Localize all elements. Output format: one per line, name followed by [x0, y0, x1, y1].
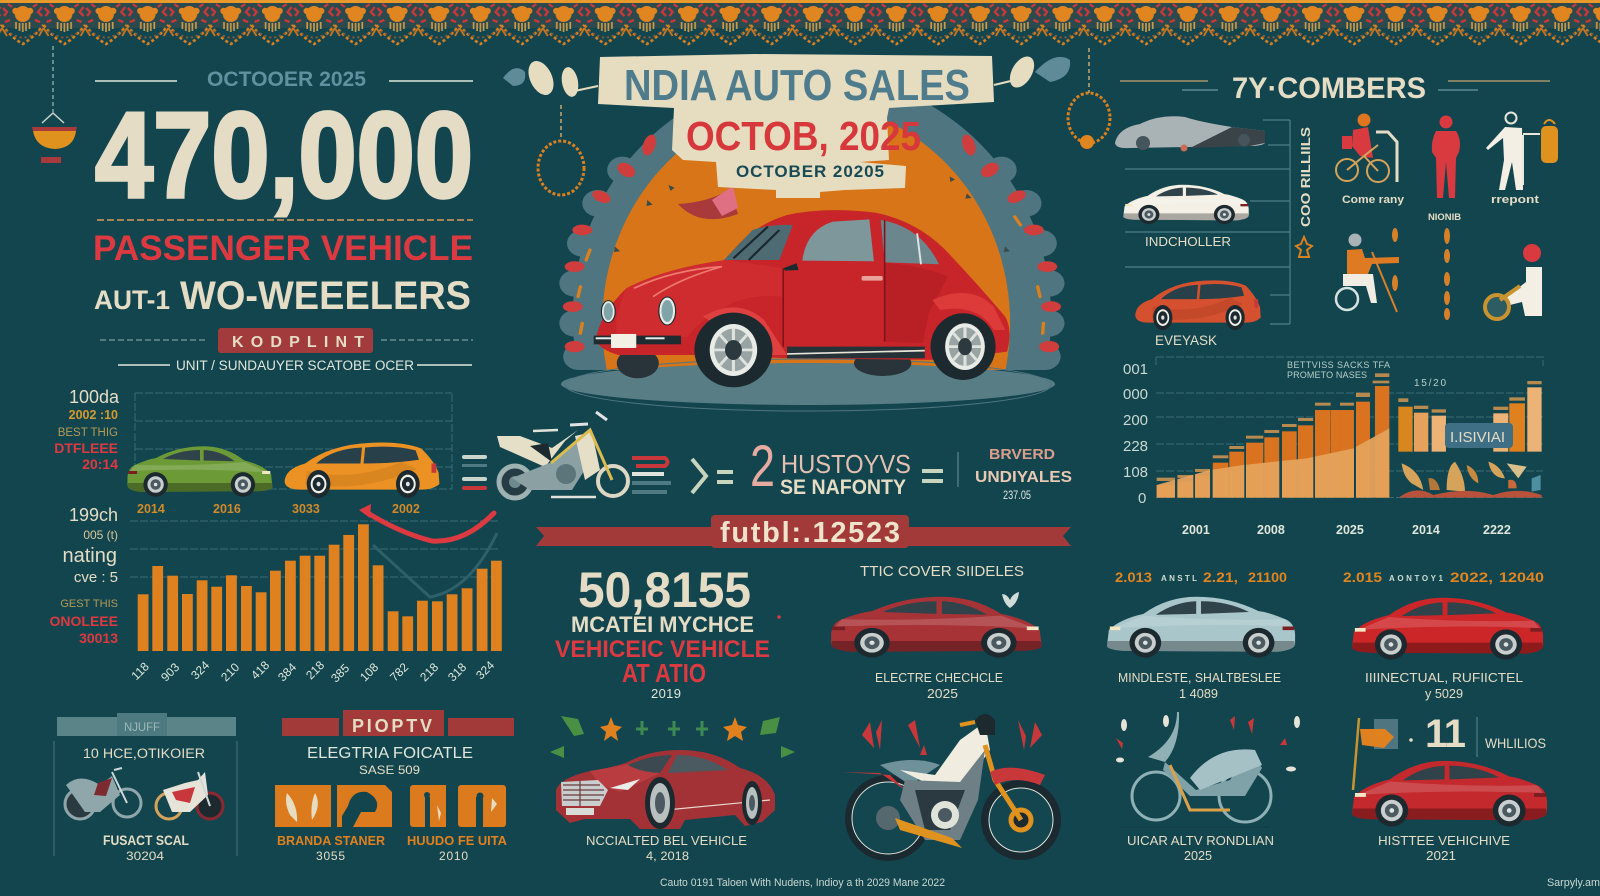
panel: bar chart	[50, 504, 502, 685]
date text: OCTOB, 2025	[686, 113, 921, 159]
icon tiles: brand	[275, 785, 392, 827]
panel: car comparison chart	[54, 387, 452, 516]
chart caption: BETTVISS SACKS TFA	[1287, 360, 1390, 370]
axis labels: 20:14	[82, 456, 118, 472]
side label: UNDIYALES	[975, 469, 1072, 486]
rotated tick labels: 218	[417, 660, 441, 684]
label: blue tag	[1445, 423, 1513, 448]
icon: maroon sedan	[831, 597, 1042, 658]
card: fiscal bikes: 10 HCE,OTIKOIER	[83, 746, 205, 761]
side label	[975, 446, 1072, 502]
leader lines	[1125, 120, 1290, 324]
axis labels: cve : 5	[74, 569, 118, 586]
axis labels: 005 (t)	[83, 528, 118, 542]
stat number	[1409, 712, 1546, 757]
icon: hanging lantern	[32, 46, 77, 163]
label: indcholler: INDCHOLLER	[1145, 234, 1231, 249]
icon: motorcycle	[497, 412, 628, 498]
icon: white person with bag	[1486, 112, 1558, 190]
label: scooter: UICAR ALTV RONDLIAN	[1127, 833, 1274, 848]
panel: right bar chart	[1123, 357, 1543, 537]
card: flag stat: 2021	[1426, 849, 1456, 863]
card: flag stat: HISTTEE VEHICHIVE	[1378, 833, 1510, 848]
icon: white car	[1123, 185, 1249, 224]
axis labels: 100da	[69, 387, 120, 407]
card: electric vehicle: 2025	[927, 686, 958, 701]
rotated tick labels: 210	[218, 660, 242, 684]
label: company: Come rany	[1342, 194, 1405, 206]
x axis labels: 2025	[1336, 523, 1364, 537]
rotated tick labels	[128, 658, 497, 685]
stat block: MCATEI MYCHCE	[571, 612, 754, 637]
subtitle: two wheelers: AUT-1	[94, 285, 170, 315]
rotated tick labels: 108	[357, 660, 381, 684]
x axis labels: 2222	[1483, 523, 1511, 537]
chart caption: PROMETO NASES	[1287, 370, 1367, 380]
x axis labels	[1182, 523, 1511, 537]
big number: 470,000	[95, 87, 473, 223]
x axis labels: 2014	[1412, 523, 1440, 537]
stat number: WHLILIOS	[1485, 735, 1546, 751]
rotated tick labels: 385	[328, 661, 352, 685]
hanging ornament left	[538, 105, 584, 195]
axis labels: ONOLEEE	[50, 613, 118, 629]
illustration: large motorcycle	[842, 714, 1061, 861]
card: flag stat	[1352, 712, 1547, 863]
date subtext: OCTOBER 20205	[736, 162, 884, 181]
axis labels: nating	[62, 545, 117, 567]
label badge: KODPLINT	[232, 334, 364, 351]
axis labels: BEST THIG	[58, 427, 118, 439]
card: fiscal bikes: 30204	[126, 849, 164, 863]
y axis labels: 200	[1123, 412, 1148, 429]
icon: red sedan	[1352, 761, 1547, 827]
arch backdrop with garland	[559, 106, 1064, 370]
card: electric forecast: 3055	[316, 849, 345, 863]
label badge	[100, 328, 473, 353]
card: light blue sedan	[1107, 570, 1295, 701]
header figures: 2.21,	[1203, 570, 1238, 585]
card: fiscal bikes: FUSACT SCAL	[103, 832, 189, 848]
illustration: red classic car	[594, 210, 1010, 387]
rotated tick labels: 384	[275, 660, 299, 684]
y axis labels: 001	[1123, 361, 1148, 378]
label: scooter: 2025	[1184, 849, 1212, 863]
icon: green car	[127, 446, 273, 497]
icon: flag	[1353, 718, 1398, 790]
icon: stripes right	[632, 458, 671, 494]
axis labels	[50, 505, 118, 646]
subtitle: passenger vehicle: PASSENGER VEHICLE	[93, 229, 473, 268]
icon: stripes left	[462, 455, 487, 490]
x axis labels: 2001	[1182, 523, 1210, 537]
label: frequent: rrepont	[1491, 194, 1539, 206]
rotated axis label: COO RILLIILS	[1298, 127, 1313, 227]
header figures	[1343, 570, 1544, 585]
heading: month: OCTOOER 2025	[207, 68, 366, 91]
red leaves	[862, 720, 1042, 755]
card: electric forecast: HUUDO FE UITA	[407, 834, 507, 848]
y axis labels: 228	[1123, 438, 1148, 455]
platform	[561, 359, 1055, 411]
icon: motorcycle red white	[156, 772, 223, 819]
panel: headline stat	[32, 46, 473, 373]
decorative top border	[0, 0, 1600, 48]
year labels: 2002	[392, 502, 420, 516]
year labels	[137, 502, 420, 516]
rotated tick labels: 903	[158, 660, 182, 684]
rotated tick labels: 324	[473, 658, 497, 682]
axis labels: 2002 :10	[69, 408, 118, 422]
stat text: HUSTOYVS	[781, 449, 911, 479]
leaves	[1116, 715, 1300, 772]
header figures: ANSTL	[1161, 574, 1197, 583]
label: scooter	[1127, 833, 1274, 863]
header figures: 12040	[1499, 570, 1544, 585]
y axis labels: 0	[1138, 490, 1146, 507]
label: eveyask: EVEYASK	[1155, 332, 1218, 348]
panel: hero illustration	[503, 48, 1112, 412]
axis labels: DTFLEEE	[54, 440, 118, 456]
panel: top combers	[1115, 72, 1558, 348]
card: electric vehicle	[831, 563, 1042, 701]
stat block	[555, 562, 781, 701]
card: sedan front view: 4, 2018	[646, 849, 689, 863]
icon: red sedan	[1352, 598, 1543, 660]
side label: BRVERD	[989, 446, 1055, 463]
rotated tick labels: 118	[128, 659, 152, 683]
side label: 237.05	[1003, 488, 1031, 502]
card: red sedan: IIIINECTUAL, RUFIICTEL	[1365, 670, 1523, 685]
y axis labels: 000	[1123, 386, 1148, 403]
stat block: 50,8155	[578, 562, 751, 618]
card: electric forecast: 2010	[439, 849, 468, 863]
header figures: 21100	[1248, 570, 1287, 585]
tab heading: NJUFF	[124, 720, 160, 734]
stat text	[780, 449, 911, 499]
x axis labels: 2008	[1257, 523, 1285, 537]
bars left group	[1157, 373, 1389, 498]
hanging ornament right	[1068, 48, 1110, 149]
card: red sedan	[1343, 570, 1544, 701]
stat number: 11	[1425, 712, 1466, 756]
header figures: 2022,	[1450, 570, 1493, 585]
rotated tick labels: 318	[445, 660, 469, 684]
illustration: scooter	[1116, 712, 1300, 827]
card: electric vehicle: TTIC COVER SIIDELES	[860, 563, 1024, 580]
ribbon heading: PIOPTV	[352, 716, 432, 736]
header figures	[1115, 570, 1287, 585]
icon: wheelchair person	[1336, 228, 1399, 312]
panel: two wheeler stat strip	[462, 412, 1072, 502]
stat block: 2019	[651, 686, 681, 701]
rotated tick labels: 418	[248, 658, 272, 682]
comparison symbols	[692, 452, 958, 493]
header figures: 2.015	[1343, 570, 1383, 585]
icon: light blue sedan	[1107, 597, 1295, 658]
chart caption	[1287, 360, 1446, 389]
card: electric forecast: SASE 509	[359, 763, 420, 777]
rotated tick labels: 782	[387, 660, 411, 684]
subtitle: two wheelers: WO-WEEELERS	[180, 274, 471, 318]
header figures: AONTOY1	[1389, 574, 1444, 583]
label: blue tag: I.ISIVIAI	[1450, 429, 1505, 446]
card: sedan front view: NCCIALTED BEL VEHICLE	[586, 833, 747, 848]
icon: red person	[1432, 116, 1460, 198]
tab heading	[57, 713, 236, 736]
stat number: 2	[750, 434, 775, 499]
icon: orange-red hatchback	[1135, 280, 1261, 330]
ribbon banner	[536, 515, 1071, 549]
leaves right	[994, 52, 1070, 92]
card: electric forecast	[275, 710, 514, 863]
card: sedan front view	[550, 716, 795, 863]
card: electric forecast: ELEGTRIA FOICATLE	[307, 745, 473, 762]
leaves left	[503, 57, 598, 99]
arrow: red trend	[359, 504, 494, 541]
icon: rider with helmet	[1485, 244, 1542, 319]
rotated tick labels: 324	[188, 658, 212, 682]
card: light blue sedan: MINDLESTE, SHALTBESLEE	[1118, 670, 1281, 685]
icon: maroon sedan front	[556, 750, 775, 829]
rotated tick labels: 218	[303, 658, 327, 682]
title text: NDIA AUTO SALES	[624, 61, 970, 110]
footer source: Cauto 0191 Taloen With Nudens, Indioy a th 2029 Mane 2022	[660, 877, 945, 889]
card: fiscal bikes	[54, 713, 237, 863]
year labels: 2016	[213, 502, 241, 516]
card: red sedan: y 5029	[1425, 686, 1463, 701]
icon: flames	[1444, 228, 1450, 320]
foliage decoration	[1400, 462, 1542, 498]
bars right group	[1398, 381, 1542, 452]
title banner	[503, 52, 1070, 198]
chart caption: 15/20	[1414, 378, 1446, 389]
icon: diya bowl	[678, 186, 738, 219]
icon: star	[1296, 237, 1312, 257]
icon: grey car	[1115, 116, 1265, 152]
axis labels: 199ch	[69, 505, 118, 525]
icon: leaf	[1002, 592, 1019, 608]
card: light blue sedan: 1 4089	[1179, 686, 1218, 701]
axis labels: 30013	[79, 630, 118, 646]
label: names: NIONIB	[1428, 212, 1462, 222]
icon: motorcycle dark	[65, 768, 141, 819]
bars	[138, 524, 502, 651]
decoration: stars and leaves	[550, 716, 795, 758]
ribbon heading	[282, 710, 514, 736]
year labels: 2014	[137, 502, 165, 516]
icon tiles: people	[410, 785, 506, 827]
heading: 7Y·COMBERS	[1232, 72, 1426, 105]
year labels: 3033	[292, 502, 320, 516]
stat block: AT ATIO	[622, 658, 706, 688]
axis labels: GEST THIS	[60, 598, 118, 610]
y axis labels: 108	[1123, 464, 1148, 481]
axis labels	[54, 387, 120, 472]
card: electric forecast: BRANDA STANER	[277, 834, 385, 848]
ribbon banner: futbl:.12523	[720, 517, 900, 549]
icon: cyclist	[1336, 114, 1397, 182]
stat text: SE NAFONTY	[780, 476, 906, 499]
card: electric vehicle: ELECTRE CHECHCLE	[875, 670, 1003, 685]
header figures: 2.013	[1115, 570, 1153, 585]
icon: orange car	[285, 442, 439, 498]
stat block: VEHICEIC VEHICLE	[555, 636, 770, 663]
footer credit: Sarpyly.am	[1547, 877, 1600, 889]
unit note: UNIT / SUNDAUYER SCATOBE OCER	[176, 358, 414, 373]
y axis labels	[1123, 361, 1148, 507]
